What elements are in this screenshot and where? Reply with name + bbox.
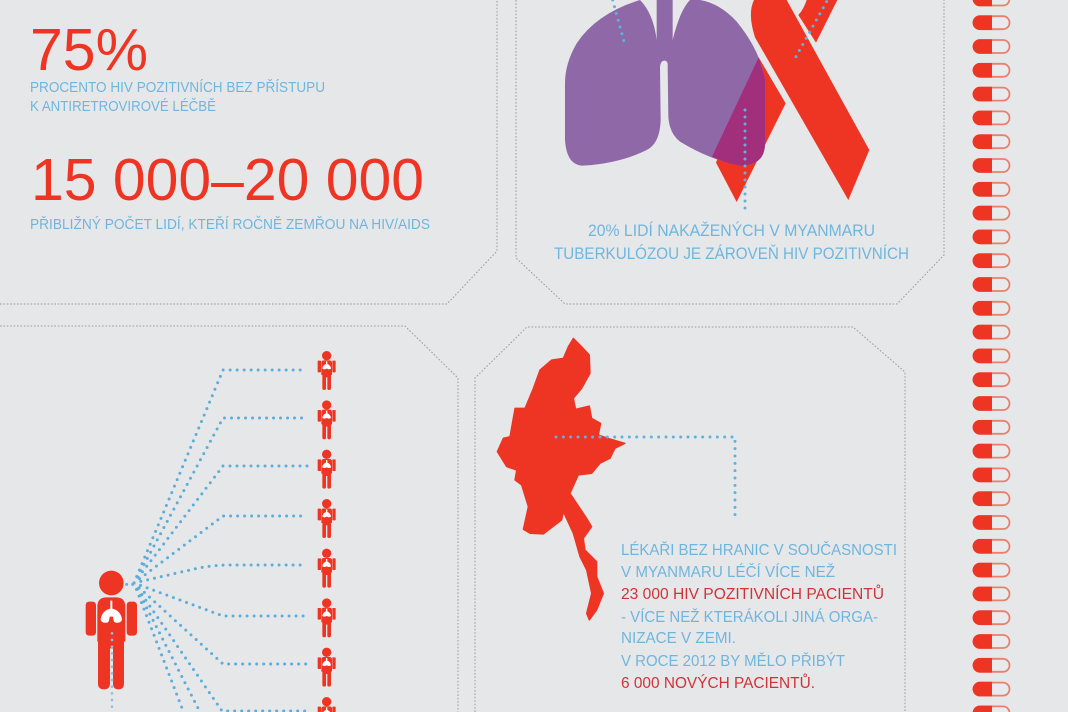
text block: MSF patients: LÉKAŘI BEZ HRANIC V SOUČASNOSTI xyxy=(621,540,897,559)
caption: TB and HIV: TUBERKULÓZOU JE ZÁROVEŇ HIV POZITIVNÍCH xyxy=(554,244,909,263)
panel: top left statistics xyxy=(0,0,497,304)
text block: MSF patients: V MYANMARU LÉČÍ VÍCE NEŽ xyxy=(621,562,835,581)
statistic: 75%: PROCENTO HIV POZITIVNÍCH BEZ PŘÍSTUPU xyxy=(30,79,325,96)
icon: central person with lungs xyxy=(86,571,137,712)
statistic: 75%: K ANTIRETROVIROVÉ LÉČBĚ xyxy=(30,98,216,115)
text block: MSF patients xyxy=(621,540,897,692)
panel: tuberculosis and HIV xyxy=(516,0,944,304)
text block: MSF patients: V ROCE 2012 BY MĚLO PŘIBÝT xyxy=(621,651,845,670)
statistic: annual deaths: 15 000–20 000 xyxy=(31,147,424,213)
icon: ribbon and lungs xyxy=(565,0,869,212)
panel: transmission diagram xyxy=(0,326,458,712)
text block: MSF patients: 23 000 HIV POZITIVNÍCH PACIENTŮ xyxy=(621,584,884,603)
map: Myanmar xyxy=(497,338,735,620)
panel: Myanmar map xyxy=(475,327,905,712)
chart: dotted spread lines xyxy=(134,370,307,712)
text block: MSF patients: - VÍCE NEŽ KTERÁKOLI JINÁ ORGA- xyxy=(621,607,878,626)
text block: MSF patients: 6 000 NOVÝCH PACIENTŮ. xyxy=(621,673,815,692)
icons: small infected people xyxy=(318,351,336,712)
statistic: 75%: 75% xyxy=(30,17,148,83)
text block: MSF patients: NIZACE V ZEMI. xyxy=(621,630,736,647)
statistic: annual deaths: PŘIBLIŽNÝ POČET LIDÍ, KTEŘÍ ROČNĚ ZEMŘOU NA HIV/AIDS xyxy=(30,216,430,233)
statistic: 75% xyxy=(30,17,325,115)
icons: column of pills xyxy=(973,0,1010,712)
caption: TB and HIV xyxy=(554,221,909,263)
caption: TB and HIV: 20% LIDÍ NAKAŽENÝCH V MYANMARU xyxy=(588,221,875,240)
